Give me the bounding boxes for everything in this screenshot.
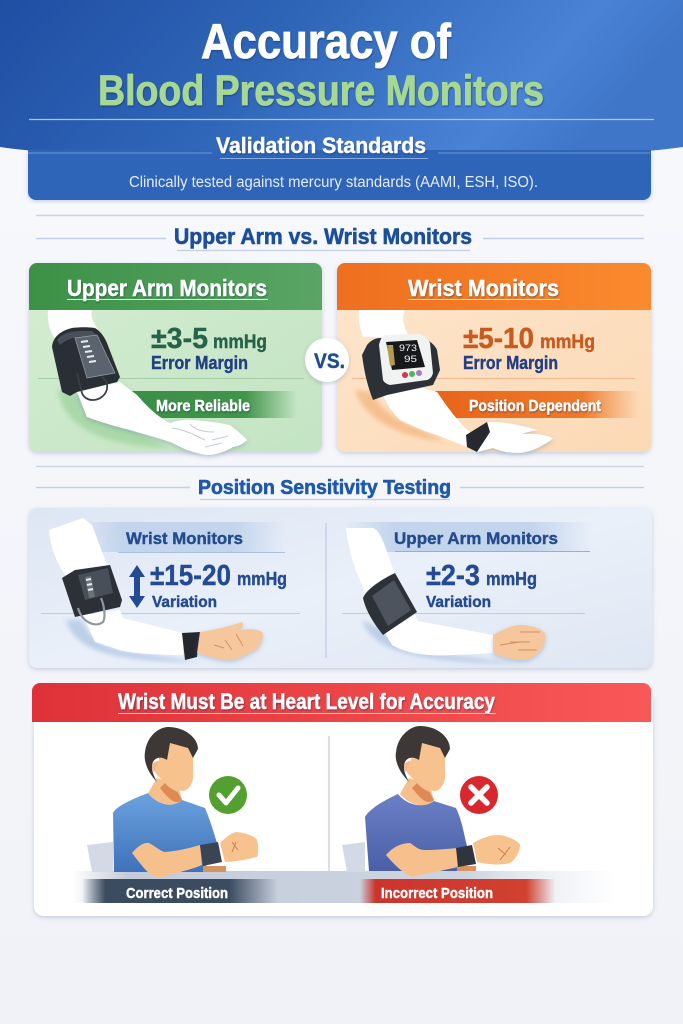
error margin value: mmHg — [213, 332, 267, 353]
icon: arm with wrist monitor: 973 — [399, 343, 417, 353]
panel: wrist at heart level — [32, 683, 653, 916]
error margin value: ±3-5 — [151, 323, 208, 355]
heading: wrist: Wrist Monitors — [408, 275, 559, 301]
error margin value: ±5-10 — [463, 323, 534, 355]
more reliable banner — [125, 391, 297, 418]
icon: x mark — [460, 776, 498, 814]
sub-panel: upper arm variation: ±2-3 — [426, 560, 480, 592]
position dependent banner — [435, 391, 640, 418]
heading: validation standards: Validation Standards — [216, 133, 426, 158]
header banner — [0, 0, 683, 153]
label: correct position — [82, 879, 278, 903]
icon: arm with cuff — [48, 310, 247, 455]
icon: check mark — [209, 776, 247, 814]
panel: wrist monitors — [337, 263, 651, 453]
title: Accuracy of — [201, 15, 452, 69]
error margin value — [151, 323, 267, 373]
validation text: Clinically tested against mercury standards (AAMI, ESH, ISO). — [129, 174, 538, 191]
icon: bent arm with cuff and wristband — [49, 518, 263, 660]
heading: upper arm: Upper Arm Monitors — [67, 275, 267, 301]
figure: correct position — [87, 727, 258, 878]
heading: position sensitivity: Position Sensitivity Testing — [198, 477, 451, 499]
banner labels: More Reliable — [156, 398, 250, 415]
sub-panel: wrist variation: Variation — [152, 594, 217, 611]
error margin value — [463, 323, 595, 373]
panel: position sensitivity — [29, 508, 652, 668]
sub-panel: upper arm variation: mmHg — [486, 569, 537, 589]
sub-panel: upper arm variation: Variation — [426, 594, 491, 611]
figure: incorrect position — [342, 726, 520, 877]
heading: upper arm vs wrist: Upper Arm vs. Wrist Monitors — [174, 224, 472, 249]
title — [98, 15, 544, 115]
heading: heart level: Wrist Must Be at Heart Level for Accuracy — [118, 689, 496, 714]
panel: upper arm monitors — [29, 263, 322, 455]
icon: arm with wrist monitor — [359, 310, 553, 453]
VS badge — [305, 338, 349, 382]
sub-panel: wrist variation: ±15-20 — [150, 560, 231, 592]
sub-panel: upper arm variation — [394, 529, 558, 611]
label: incorrect position: Incorrect Position — [381, 885, 493, 902]
error margin value: Error Margin — [151, 353, 248, 373]
banner labels: Position Dependent — [469, 398, 602, 415]
icon: bent arm with cuff and fist — [346, 528, 545, 660]
sub-panel: wrist variation — [126, 529, 287, 611]
VS badge: VS. — [314, 350, 345, 373]
error margin value: mmHg — [540, 332, 595, 353]
label: correct position: Correct Position — [126, 885, 228, 902]
title: Blood Pressure Monitors — [98, 67, 544, 115]
label: incorrect position — [360, 879, 555, 903]
sub-panel: wrist variation: Wrist Monitors — [126, 529, 243, 548]
panel: validation standards — [28, 133, 651, 200]
floor band — [72, 871, 620, 903]
icon: double arrow — [129, 565, 145, 608]
error margin value: Error Margin — [463, 353, 558, 373]
sub-panel: wrist variation: mmHg — [237, 569, 287, 589]
sub-panel: upper arm variation: Upper Arm Monitors — [394, 529, 558, 548]
banner labels — [156, 398, 602, 415]
icon: arm with wrist monitor: 95 — [404, 354, 417, 364]
